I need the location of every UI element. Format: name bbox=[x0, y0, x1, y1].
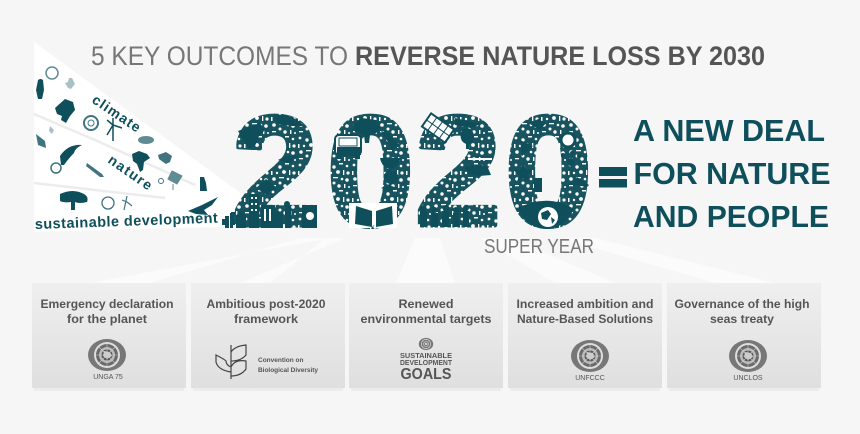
icon: book bbox=[349, 203, 397, 228]
icon row: city and bin bbox=[225, 194, 317, 228]
card: high seas treaty: UNCLOS bbox=[733, 375, 763, 382]
digit 0: 0 bbox=[327, 85, 414, 259]
icon: UN emblem bbox=[571, 340, 609, 372]
nature icons bbox=[36, 67, 235, 225]
label: nature: nature bbox=[105, 151, 156, 193]
card: post-2020 framework bbox=[191, 283, 345, 391]
headline: a new deal for nature and people: A NEW DEAL bbox=[633, 113, 825, 148]
icon: UN emblem bbox=[729, 340, 767, 372]
headline: a new deal for nature and people bbox=[633, 113, 830, 234]
card: renewed targets: GOALS bbox=[400, 366, 452, 383]
icon: people row bbox=[420, 205, 469, 227]
label: sustainable development: sustainable development bbox=[35, 211, 218, 233]
card: increased ambition: UNFCCC bbox=[575, 375, 605, 382]
wedge with climate, nature and sustainable development icons bbox=[34, 42, 250, 233]
card: renewed targets: DEVELOPMENT bbox=[400, 360, 453, 367]
headline: a new deal for nature and people: FOR NATURE bbox=[634, 156, 830, 191]
card: post-2020 framework: Ambitious post-2020 bbox=[206, 297, 326, 311]
title: REVERSE NATURE LOSS BY 2030 bbox=[355, 41, 765, 71]
card: emergency declaration: UNGA 75 bbox=[93, 374, 123, 381]
card: emergency declaration: for the planet bbox=[67, 312, 147, 326]
big number 2020 bbox=[232, 85, 592, 259]
card: high seas treaty: seas treaty bbox=[710, 312, 774, 326]
digit 2: 2 bbox=[232, 85, 318, 259]
super year label: SUPER YEAR bbox=[484, 236, 594, 258]
card: renewed targets: Renewed bbox=[398, 297, 454, 311]
card: renewed targets bbox=[349, 283, 503, 391]
card: emergency declaration bbox=[32, 283, 186, 391]
card: emergency declaration: Emergency declaration bbox=[40, 297, 174, 311]
card: renewed targets: SUSTAINABLE bbox=[400, 353, 452, 360]
icon: tree and bowl in 0 bbox=[353, 118, 400, 169]
icon: eye with globe bbox=[518, 201, 574, 229]
card: high seas treaty: Governance of the high bbox=[674, 297, 810, 311]
icon: tree, bison in 2 bbox=[455, 118, 491, 176]
icon: leaf shapes in 2 bbox=[238, 115, 305, 195]
card: high seas treaty bbox=[667, 283, 821, 391]
icons within the digits bbox=[225, 113, 589, 229]
equals sign bbox=[599, 167, 627, 188]
card: post-2020 framework: Biological Diversity bbox=[258, 367, 318, 374]
headline: a new deal for nature and people: AND PEOPLE bbox=[633, 199, 829, 234]
digit 2: 2 bbox=[415, 85, 501, 259]
digit 0: 0 bbox=[505, 85, 592, 259]
title: 5 KEY OUTCOMES TO bbox=[91, 41, 348, 71]
icon: UN emblem bbox=[88, 339, 126, 371]
card: increased ambition: Nature-Based Solutions bbox=[517, 312, 653, 326]
card: renewed targets: environmental targets bbox=[360, 312, 492, 326]
icon: fish and skull bbox=[381, 170, 398, 191]
card: increased ambition bbox=[508, 283, 662, 391]
light rays from digits to cards bbox=[90, 238, 775, 283]
icon: SDG logo bbox=[419, 338, 433, 350]
label: climate: climate bbox=[89, 91, 144, 135]
icon: solar panel bbox=[422, 113, 454, 143]
card: post-2020 framework: framework bbox=[234, 312, 298, 326]
icon: CBD plant logo bbox=[216, 345, 246, 379]
icon: recycling and paw bbox=[513, 119, 589, 192]
title bbox=[91, 41, 765, 71]
icon: car bbox=[335, 135, 361, 159]
card: post-2020 framework: Convention on bbox=[258, 357, 304, 364]
card: increased ambition: Increased ambition and bbox=[516, 297, 654, 311]
